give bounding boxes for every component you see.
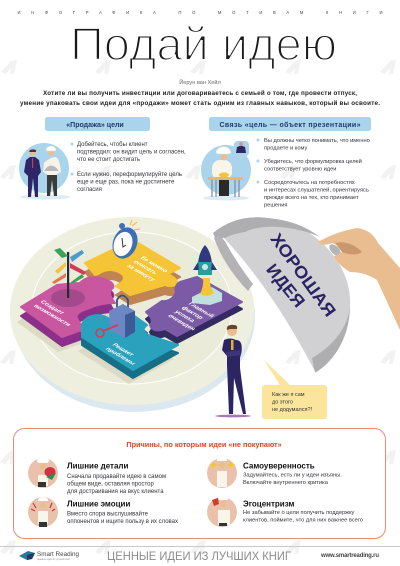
puzzle piece: yellow: описать (131, 259, 159, 276)
reason: extra emotions: Вместо спора выслушивайте (67, 510, 149, 518)
bullet list: согласия (77, 187, 102, 193)
reason: extra emotions: Лишние эмоции (67, 500, 130, 508)
icon: signpost (52, 248, 86, 298)
reason: extra emotions (28, 497, 178, 527)
icon: hand (318, 228, 400, 330)
reason: self-confidence: Задумайтесь, есть ли у идеи изъяны. (243, 472, 342, 478)
bullet list: еще и еще раз, пока не достигнете (77, 180, 175, 186)
reason: self-confidence (207, 457, 342, 488)
puzzle piece: yellow (85, 240, 180, 304)
puzzle piece: teal: проблемы (103, 346, 137, 366)
icon: chef with flowers (28, 457, 58, 488)
puzzle piece: teal: Решает (110, 342, 136, 357)
puzzle piece: purple (146, 277, 242, 343)
puzzle piece: pink: Создает (38, 299, 66, 316)
reason: egocentrism: Не забывайте о цели получить поддержку (243, 509, 355, 516)
puzzle piece: purple: Главный (186, 301, 216, 319)
tagline: ЦЕННЫЕ ИДЕИ ИЗ ЛУЧШИХ КНИГ (107, 549, 291, 563)
cloche label: ХОРОШАЯ (266, 230, 339, 320)
website: www.smartreading.ru (320, 553, 379, 559)
puzzle piece: purple: фактор (179, 305, 205, 320)
heading: sales of goals (45, 117, 150, 131)
knob (327, 242, 343, 258)
header kicker: ИНФОГРАФИКА ПО МОТИВАМ КНИГИ (18, 10, 382, 15)
panel: reasons (14, 428, 386, 538)
puzzle piece: purple: успеха (173, 309, 197, 324)
reason: self-confidence: Включайте внутреннего критика (243, 479, 329, 486)
panel heading: Причины, по которым идеи «не покупают» (126, 440, 282, 449)
bullet list: что ее стоит достигать (77, 157, 140, 163)
bullet list: соответствует уровню идеи (264, 166, 336, 172)
bullet list: Убедитесь, что формулировка целей (264, 158, 362, 165)
figure: businessman (215, 325, 251, 417)
bullet list (256, 138, 370, 208)
panel: sales of goals (19, 117, 186, 200)
bullet list: Вы должны четко понимать, что именно (264, 138, 370, 144)
cloche dome (213, 217, 350, 373)
icon: lock and key (96, 296, 135, 338)
author: Йерун ван Хейл (179, 78, 221, 86)
puzzle piece: yellow: Ее можно (138, 255, 170, 274)
bullet list: Сосредоточьтесь на потребностях (264, 180, 355, 186)
reason: egocentrism: клиентов, поймите, что для них важнее всего (243, 516, 363, 524)
cloche label: ИДЕЯ (262, 260, 309, 311)
reason: extra emotions: оппонентов и ищите пользу в их словах (67, 519, 178, 525)
bullet list: прежде всего на тех, кто принимает (264, 195, 359, 201)
reason: egocentrism (207, 496, 363, 527)
plate (10, 217, 255, 412)
puzzle piece: pink (17, 277, 115, 352)
callout: до этого (272, 400, 293, 406)
reason: extra details: для достраивания на вкус клиента (67, 489, 164, 495)
reason: egocentrism: Эгоцентризм (243, 500, 295, 508)
intro text: Хотите ли вы получить инвестиции или договариваетесь с семьей о том, где провести отпуск, (43, 89, 357, 97)
footer (0, 546, 400, 563)
title: Подай идею (70, 18, 337, 70)
logo (19, 551, 79, 561)
reason: self-confidence: Самоуверенность (243, 462, 315, 470)
bullet list: и интересах слушателей, ориентируясь (264, 186, 369, 194)
callout: Как же я сам (272, 392, 305, 398)
illustration: plate with puzzle (10, 217, 255, 412)
bullet list: Добейтесь, чтобы клиент (77, 141, 148, 148)
reason: extra details (28, 457, 166, 495)
callout: не додумался?! (272, 407, 313, 413)
bullet list: решения (264, 202, 287, 208)
reason: extra details: Сначала продавайте идею в самом (67, 473, 166, 480)
heading: goal and presentation: Связь «цель — объект презентации» (220, 121, 361, 129)
illustration: chef at table (201, 141, 251, 200)
puzzle piece: teal (78, 315, 178, 384)
icon: proud chef (207, 496, 237, 527)
reason: extra details: общем виде, оставляя простор (67, 482, 154, 488)
intro text: умение упаковать свои идеи для «продажи» может стать одним из главных навыков, который вы освоите. (20, 99, 380, 107)
illustration: businessman and chef (19, 143, 70, 200)
bullet list: продаете и кому (264, 146, 307, 152)
logo: ценные идеи из лучших книг (37, 558, 70, 561)
icon: rocket (192, 245, 222, 305)
bullet list (70, 141, 186, 193)
icon: alarm clock (108, 220, 142, 262)
intro text (20, 89, 380, 107)
illustration: cloche with label (213, 217, 350, 373)
icon: confident chef (207, 457, 237, 488)
puzzle piece: purple: очевиден (166, 313, 197, 332)
reason: extra details: Лишние детали (67, 462, 128, 470)
icon: angry chef (28, 497, 58, 527)
puzzle piece: pink: возможности (31, 303, 73, 327)
bullet list: Если нужно, переформулируйте цель (77, 171, 182, 178)
callout (262, 360, 327, 419)
heading: sales of goals: «Продажа» цели (66, 122, 124, 129)
heading: goal and presentation (209, 117, 371, 131)
puzzle piece: yellow: за минуту (125, 263, 157, 283)
panel: goal and presentation (201, 117, 371, 208)
bullet list: подтвердил: он видит цель и согласен, (77, 150, 186, 156)
logo: Smart Reading (37, 551, 79, 558)
